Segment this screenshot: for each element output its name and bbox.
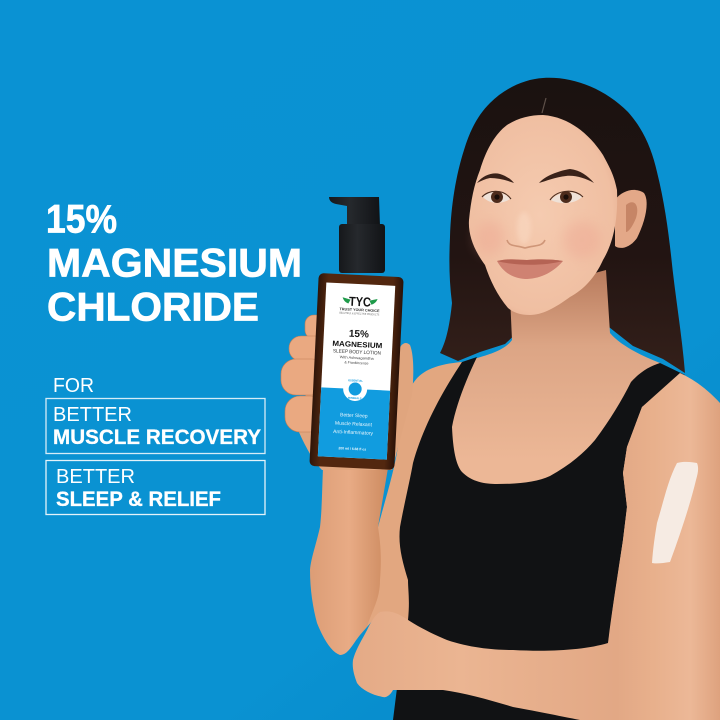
label benefits: Better Sleep bbox=[340, 412, 368, 420]
badge: essential minerals: MINERALS bbox=[348, 396, 362, 400]
label product name: MAGNESIUM bbox=[332, 339, 383, 350]
face bbox=[469, 115, 617, 315]
holding forearm bbox=[310, 468, 388, 655]
top below forearm bbox=[393, 680, 600, 720]
callout: better muscle recovery: MUSCLE RECOVERY bbox=[53, 426, 261, 449]
torso skin bbox=[410, 270, 680, 650]
label benefits: 200 ml / 6.68 fl oz bbox=[338, 446, 366, 452]
person bbox=[281, 78, 720, 720]
hair part bbox=[542, 98, 546, 113]
badge: essential minerals bbox=[343, 376, 368, 402]
label benefits: Muscle Relaxant bbox=[335, 421, 373, 428]
heading: 15% magnesium chloride: MAGNESIUM bbox=[47, 242, 302, 286]
black tank top bbox=[399, 357, 685, 660]
label blue panel bbox=[318, 387, 390, 460]
label bbox=[318, 282, 395, 460]
label product name: SLEEP BODY LOTION bbox=[333, 348, 381, 357]
heading: 15% magnesium chloride: CHLORIDE bbox=[47, 286, 259, 330]
pump bbox=[329, 197, 385, 273]
label benefits bbox=[332, 412, 374, 452]
text: for: FOR bbox=[53, 375, 94, 397]
holding hand palm bbox=[296, 320, 413, 470]
callout: better muscle recovery bbox=[46, 398, 265, 454]
left eye bbox=[482, 191, 511, 203]
heading: 15% magnesium chloride: 15% bbox=[46, 198, 117, 242]
callout: better sleep and relief bbox=[46, 460, 265, 514]
nose bbox=[507, 240, 545, 248]
product bottle bbox=[309, 273, 404, 470]
pump collar bbox=[339, 224, 385, 273]
callout: better sleep and relief: SLEEP & RELIEF bbox=[56, 488, 221, 511]
label product name: & Frankincense bbox=[344, 360, 369, 366]
nose highlight bbox=[517, 212, 531, 244]
right eyebrow bbox=[539, 169, 594, 183]
left eyebrow bbox=[477, 173, 514, 183]
bottle body bbox=[309, 273, 404, 470]
callout: better muscle recovery: BETTER bbox=[53, 404, 132, 426]
brand logo: TRUST YOUR CHOICE bbox=[339, 307, 380, 313]
pump nozzle bbox=[329, 197, 380, 226]
left upper arm bbox=[367, 362, 462, 627]
ear bbox=[615, 190, 647, 248]
right eye bbox=[550, 191, 583, 203]
arm and crossed forearm with fist bbox=[353, 373, 720, 720]
heading: 15% magnesium chloride bbox=[46, 198, 302, 330]
callout: better sleep and relief: BETTER bbox=[56, 466, 135, 488]
fingers bbox=[281, 315, 327, 432]
label product name bbox=[331, 328, 383, 366]
brand logo bbox=[339, 293, 381, 317]
label product name: 15% bbox=[349, 329, 369, 341]
lips bbox=[497, 259, 563, 279]
badge: essential minerals: ESSENTIAL bbox=[348, 378, 363, 383]
hair bbox=[440, 78, 685, 373]
label product name: With Ashwagandha bbox=[340, 355, 374, 361]
cheek blush bbox=[475, 221, 505, 255]
brand logo: TYC bbox=[349, 294, 372, 310]
cream swatch bbox=[652, 462, 698, 563]
label benefits: Anti-Inflammatory bbox=[333, 429, 374, 437]
brand logo: BEAUTIFUL & EFFECTIVE PRODUCTS bbox=[339, 311, 380, 317]
